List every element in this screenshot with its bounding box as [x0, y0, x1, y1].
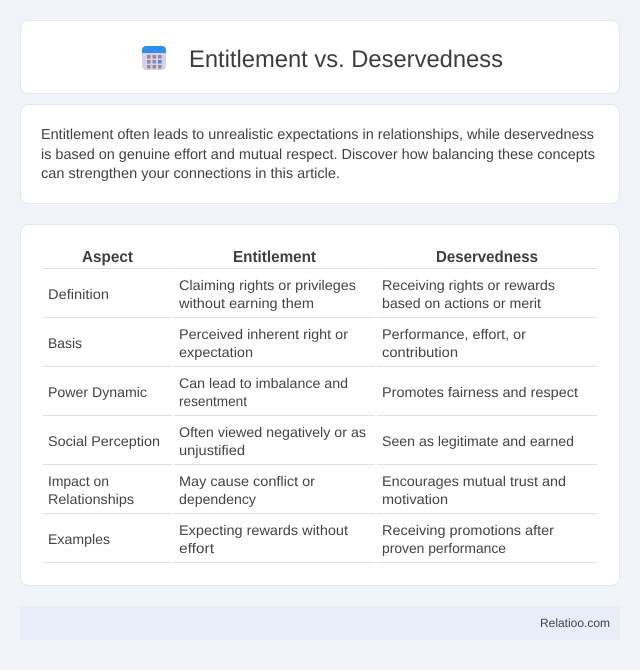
row: power dynamic: Promotes fairness and respect — [382, 384, 578, 400]
row: social perception: unjustified — [179, 442, 245, 458]
row: social perception: Social Perception — [48, 433, 160, 449]
row: impact on relationships: May cause conflict or — [179, 473, 315, 489]
row: definition: Receiving rights or rewards — [382, 277, 555, 293]
icon: calendar — [142, 46, 166, 70]
table header: Aspect — [82, 249, 134, 266]
row: social perception: Seen as legitimate and earned — [382, 433, 574, 449]
row: definition: Claiming rights or privileges — [179, 277, 356, 293]
row: definition: Definition — [48, 286, 109, 302]
row: basis: contribution — [382, 344, 458, 360]
row: examples: effort — [179, 540, 214, 556]
row: examples: Examples — [48, 531, 110, 547]
row: definition: based on actions or merit — [382, 295, 541, 311]
header panel — [20, 20, 620, 94]
row: impact on relationships: dependency — [179, 491, 256, 507]
row: definition — [48, 277, 555, 311]
row: basis: Performance, effort, or — [382, 326, 526, 342]
panel: comparison table — [20, 224, 620, 586]
intro text: Entitlement often leads to unrealistic expectations in relationships, while deservedness — [41, 127, 594, 143]
row: power dynamic: resentment — [179, 393, 247, 409]
panel: intro — [20, 104, 620, 204]
row: impact on relationships: Encourages mutual trust and — [382, 473, 566, 489]
row: impact on relationships: Impact on — [48, 473, 109, 489]
row: social perception: Often viewed negatively or as — [179, 424, 366, 440]
intro text — [41, 127, 595, 182]
row: examples: Expecting rewards without — [179, 522, 348, 538]
row: basis — [48, 326, 526, 360]
footer — [20, 606, 620, 640]
footer credit: Relatioo.com — [540, 616, 610, 630]
row: definition: without earning them — [178, 295, 314, 311]
row: power dynamic: Can lead to imbalance and — [179, 375, 348, 391]
row: examples: Receiving promotions after — [382, 522, 554, 538]
intro text: can strengthen your connections in this article. — [41, 166, 340, 182]
table header: Entitlement — [233, 249, 317, 266]
table header: Deservedness — [436, 249, 538, 266]
row: power dynamic: Power Dynamic — [48, 384, 147, 400]
row: power dynamic — [48, 375, 578, 409]
row: examples — [48, 522, 554, 556]
title: Entitlement vs. Deservedness — [189, 46, 503, 73]
row: social perception — [48, 424, 574, 458]
row: basis: expectation — [179, 344, 253, 360]
row: basis: Perceived inherent right or — [179, 326, 348, 342]
intro text: is based on genuine effort and mutual respect. Discover how balancing these concepts — [41, 147, 595, 163]
row: basis: Basis — [48, 335, 82, 351]
row: impact on relationships — [48, 473, 566, 507]
row: examples: proven performance — [382, 540, 506, 556]
row: impact on relationships: motivation — [382, 491, 448, 507]
table header — [82, 249, 538, 266]
row: impact on relationships: Relationships — [48, 491, 134, 507]
